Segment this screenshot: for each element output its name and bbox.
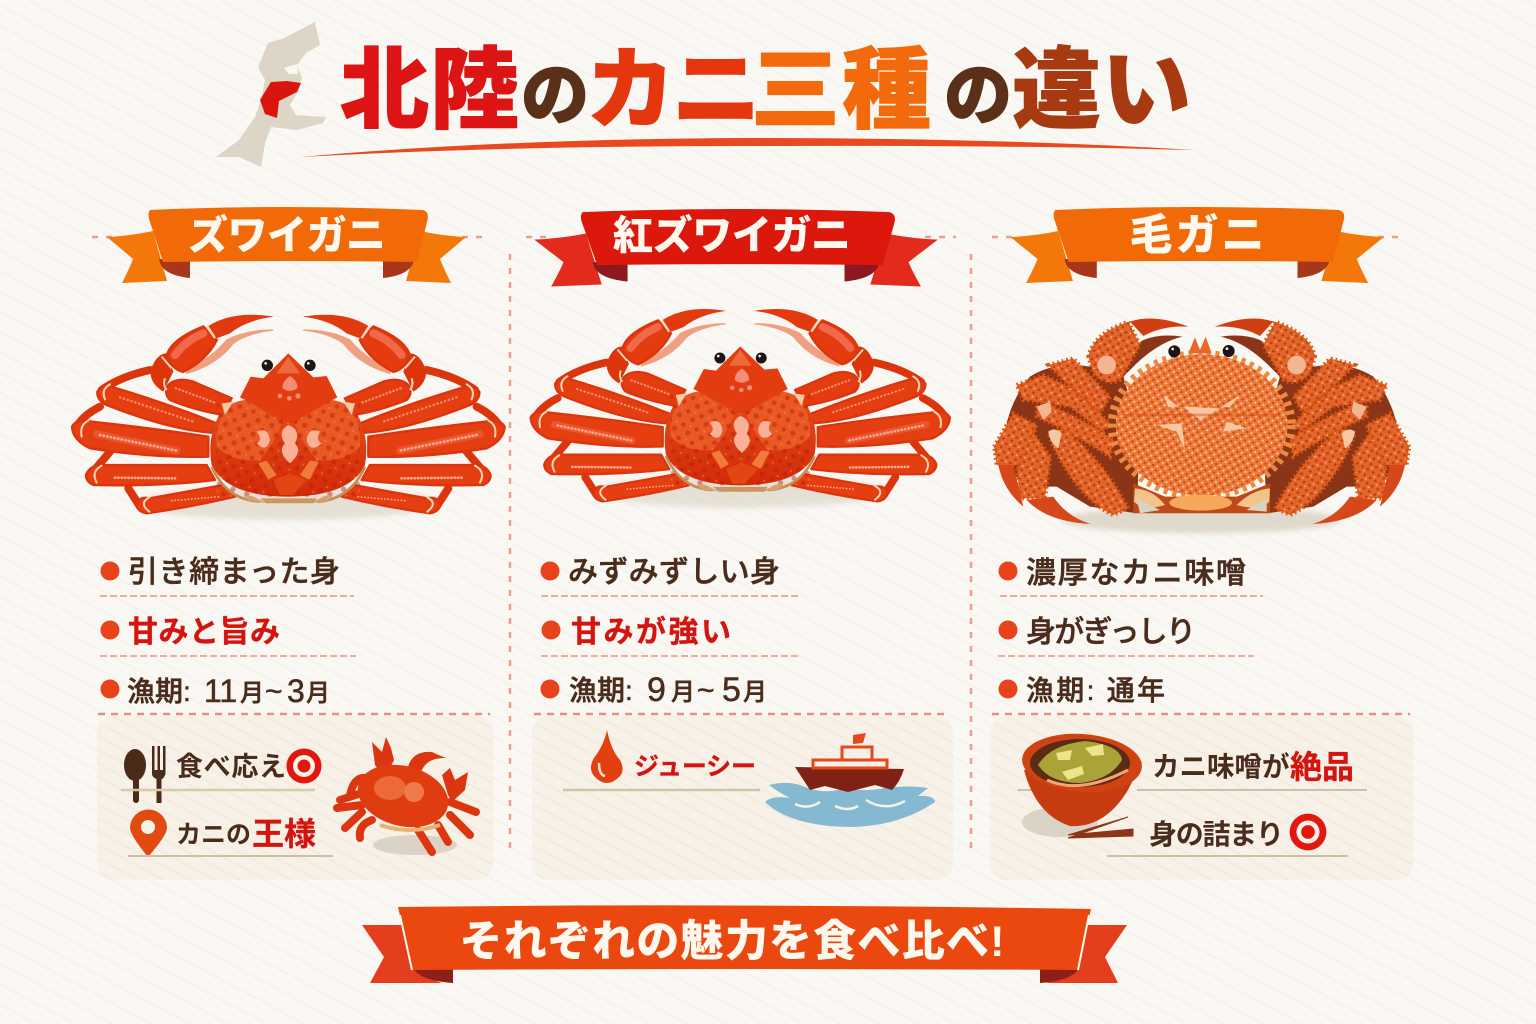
icon: small crab bbox=[337, 737, 476, 855]
ribbon: 紅ズワイガニ bbox=[534, 209, 938, 287]
title: の bbox=[521, 58, 589, 134]
feature list: ズワイガニ: 引き締まった身 bbox=[128, 556, 340, 589]
ribbon: 毛ガニ: 毛ガニ bbox=[1130, 212, 1264, 260]
icon: Hokuriku map bbox=[216, 22, 326, 167]
feature list: 紅ズワイガニ: 月 bbox=[743, 679, 767, 706]
feature list: 紅ズワイガニ bbox=[540, 556, 799, 709]
feature list: 紅ズワイガニ: 漁期: bbox=[569, 675, 633, 706]
footer ribbon bbox=[362, 905, 1127, 983]
label: カニの王様 bbox=[176, 816, 316, 852]
feature list: 紅ズワイガニ: 甘みが強い bbox=[571, 615, 731, 649]
feature list: ズワイガニ bbox=[100, 556, 356, 709]
feature list: 毛ガニ: 濃厚なカニ味噌 bbox=[1026, 557, 1246, 590]
ribbon: ズワイガニ: ズワイガニ bbox=[188, 213, 386, 258]
info box: 食べ応え / カニの王様 bbox=[97, 714, 493, 880]
title: の bbox=[944, 58, 1012, 134]
feature list: ズワイガニ: 月 bbox=[240, 680, 264, 707]
illustration: red snow crab bbox=[531, 309, 950, 508]
feature list: ズワイガニ: 漁期: bbox=[127, 676, 191, 707]
illustration: horsehair crab bbox=[994, 318, 1409, 533]
feature list: ズワイガニ: 11 bbox=[204, 673, 237, 709]
label: カニ味噌が絶品: カニ味噌が bbox=[1152, 751, 1290, 782]
feature list: 毛ガニ: 漁期: 通年 bbox=[1026, 675, 1165, 706]
label: カニ味噌が絶品: 絶品 bbox=[1290, 749, 1354, 785]
feature list: 紅ズワイガニ: ~ bbox=[697, 674, 715, 707]
icon: spoon and fork bbox=[124, 746, 166, 803]
feature list: ズワイガニ: 甘みと旨み bbox=[128, 616, 280, 649]
panel: ズワイガニ bbox=[72, 207, 505, 880]
feature list: 紅ズワイガニ: 5 bbox=[722, 671, 741, 709]
feature list: 毛ガニ: 身がぎっしり bbox=[1026, 616, 1196, 649]
feature list: ズワイガニ: ~ bbox=[265, 675, 283, 708]
feature list: 毛ガニ bbox=[998, 557, 1263, 706]
chopsticks bbox=[1068, 817, 1133, 838]
feature list: 紅ズワイガニ: 月 bbox=[671, 679, 695, 706]
feature list: 紅ズワイガニ: 9 bbox=[647, 671, 666, 709]
title: カニ bbox=[586, 40, 761, 140]
icon: target bbox=[1290, 814, 1326, 850]
panel: 紅ズワイガニ bbox=[531, 209, 953, 880]
icon: juice drop bbox=[591, 730, 623, 783]
feature list: ズワイガニ: 月 bbox=[306, 680, 330, 707]
feature list: ズワイガニ: 3 bbox=[287, 673, 305, 709]
label: 食べ応え: 食べ応え bbox=[176, 752, 286, 782]
info box: カニ味噌が絶品 / 身の詰まり bbox=[990, 714, 1413, 880]
title: 違い bbox=[1012, 40, 1191, 140]
icon: bowl of crab miso bbox=[1020, 730, 1144, 838]
title: 三種 bbox=[751, 40, 931, 140]
label: ジューシー: ジューシー bbox=[634, 753, 756, 781]
ribbon: ズワイガニ bbox=[107, 207, 466, 283]
title: 北陸 bbox=[340, 40, 519, 140]
footer ribbon: それぞれの魅力を食べ比べ! bbox=[460, 918, 1004, 966]
ribbon: 紅ズワイガニ: 紅ズワイガニ bbox=[613, 213, 851, 258]
icon: target bbox=[286, 748, 322, 784]
icon: map pin bbox=[130, 810, 167, 857]
panel: 毛ガニ bbox=[990, 207, 1413, 880]
column dividers bbox=[92, 237, 1405, 855]
illustration: snow crab bbox=[72, 315, 505, 520]
label: 身の詰まり: 身の詰まり bbox=[1149, 819, 1284, 850]
label: カニ味噌が絶品 bbox=[1152, 749, 1354, 785]
label: カニの王様: 王様 bbox=[252, 816, 316, 852]
title underline stroke bbox=[301, 138, 1193, 157]
info box: ジューシー bbox=[532, 714, 953, 880]
label: カニの王様: カニの bbox=[176, 821, 251, 849]
feature list: 紅ズワイガニ: みずみずしい身 bbox=[568, 556, 780, 589]
ribbon: 毛ガニ bbox=[1010, 207, 1384, 283]
icon: ship on water bbox=[765, 733, 935, 827]
